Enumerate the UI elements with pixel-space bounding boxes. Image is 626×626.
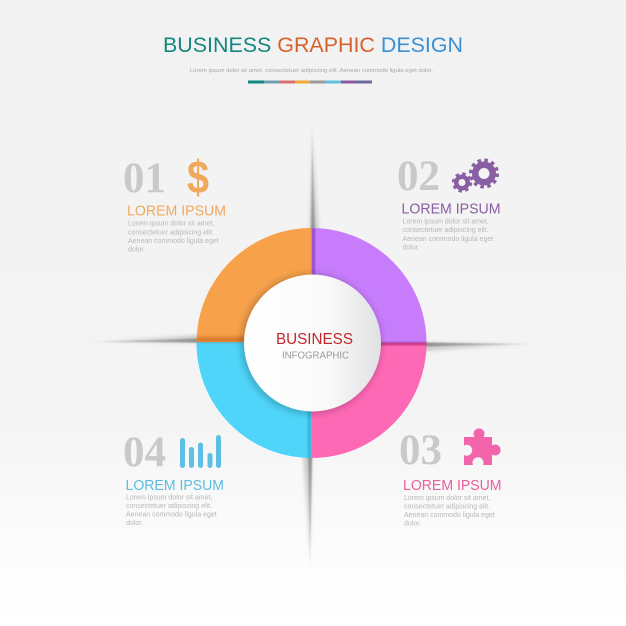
centre sublabel: INFOGRAPHIC	[282, 350, 349, 362]
heading 04: LOREM IPSUM	[126, 478, 224, 494]
body 03: Aenean commodo ligula eget	[404, 512, 495, 519]
body 04: Aenean commodo ligula eget	[126, 512, 217, 518]
body 03: dolor.	[404, 520, 421, 528]
ring fold shadows	[196, 228, 428, 458]
panel: 04	[123, 429, 224, 527]
body 01: dolor.	[128, 246, 145, 254]
donut chart	[196, 228, 428, 458]
title: BUSINESS GRAPHIC DESIGN	[163, 33, 463, 57]
heading 01: LOREM IPSUM	[127, 204, 226, 220]
body 04: Lorem ipsum dolor sit amet,	[126, 494, 212, 502]
icon: puzzle	[464, 428, 501, 465]
number 03: 03	[399, 427, 442, 474]
body 03: consectetuer adipiscing elit.	[404, 504, 490, 510]
body 02: consectetuer adipiscing elit.	[402, 227, 489, 234]
icon: bar chart	[180, 435, 221, 468]
heading 02: LOREM IPSUM	[402, 202, 500, 218]
panel: 01	[123, 151, 226, 254]
icon: gears	[454, 161, 497, 191]
body 01: Lorem ipsum dolor sit amet,	[128, 220, 214, 228]
segment: purple	[312, 228, 426, 343]
shadow: bottom fold	[303, 454, 312, 576]
body 01: consectetuer adipiscing elit.	[128, 230, 214, 236]
icon: dollar: $	[187, 151, 209, 203]
body 02: Aenean commodo ligula eget	[402, 236, 493, 243]
shadow: top fold	[310, 118, 319, 232]
body 02: Lorem ipsum dolor sit amet,	[402, 218, 489, 226]
centre label: BUSINESS	[276, 331, 353, 348]
panel: 02	[397, 153, 500, 252]
body 04: dolor.	[126, 520, 143, 527]
centre disc	[244, 274, 381, 412]
panel: 03	[399, 427, 502, 528]
segment: pink	[312, 343, 426, 458]
body 03: Lorem ipsum dolor sit amet,	[404, 495, 490, 502]
number 02: 02	[397, 153, 440, 200]
segment: orange	[196, 228, 312, 342]
body 04: consectetuer adipiscing elit.	[126, 503, 212, 510]
number 01: 01	[123, 155, 166, 202]
subtitle: Lorem ipsum dolor sit amet, consectetuer adipiscing elit. Aenean commodo ligula eget dolor.	[190, 68, 433, 74]
shadow: right fold	[424, 342, 541, 351]
body 01: Aenean commodo ligula eget	[128, 238, 219, 245]
number 04: 04	[123, 429, 166, 476]
colour strip	[248, 80, 372, 84]
body 02: dolor.	[402, 244, 420, 252]
heading 03: LOREM IPSUM	[403, 478, 502, 494]
shadow: left fold	[84, 335, 200, 343]
segment: blue	[196, 342, 312, 458]
